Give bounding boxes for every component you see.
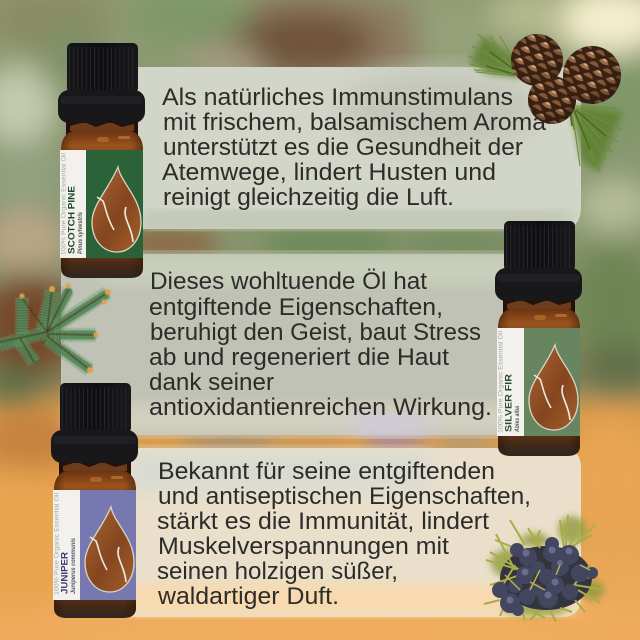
bottle: juniper xyxy=(51,383,138,618)
text block: juniper xyxy=(157,458,531,610)
text block: juniper: waldartiger Duft. xyxy=(157,583,339,610)
panel: scotch pine xyxy=(120,67,581,229)
text block: juniper: seinen holzigen süßer, xyxy=(157,558,398,585)
icon: juniper berries with needles xyxy=(484,515,605,622)
text block: scotch pine: reinigt gleichzeitig die Luft. xyxy=(163,184,454,211)
label text: juniper: 100% Pure Organic Essential Oil xyxy=(54,493,60,595)
label text: silver fir: 100% Pure Organic Essential Oil xyxy=(498,331,504,433)
text block: silver fir xyxy=(149,268,492,421)
text block: silver fir: dank seiner xyxy=(149,369,274,396)
icon: spruce sprig xyxy=(0,284,111,373)
label text: scotch pine: SCOTCH PINE xyxy=(66,186,78,254)
text block: silver fir: antioxidantienreichen Wirkung. xyxy=(149,394,492,421)
text block: silver fir: beruhigt den Geist, baut Stress xyxy=(150,319,481,346)
text block: juniper: Muskelverspannungen mit xyxy=(158,533,449,560)
label text: scotch pine: 100% Pure Organic Essential Oil xyxy=(62,153,68,255)
text block: silver fir: ab und regeneriert die Haut xyxy=(149,344,449,371)
label text: scotch pine: Pinus sylvestris xyxy=(78,211,84,254)
text block: silver fir: entgiftende Eigenschaften, xyxy=(149,294,443,321)
text block: scotch pine: Als natürliches Immunstimulans xyxy=(162,84,513,111)
label text: juniper xyxy=(54,493,77,595)
label text: scotch pine xyxy=(62,153,84,255)
text block: juniper: Bekannt für seine entgiftenden xyxy=(158,458,495,485)
label text: silver fir xyxy=(498,331,521,433)
label text: juniper: Juniperus communis xyxy=(71,537,77,594)
text block: juniper: stärkt es die Immunität, lindert xyxy=(157,508,489,535)
text block: scotch pine: unterstützt es die Gesundheit der xyxy=(163,134,523,161)
text block: scotch pine: mit frischem, balsamischem Aroma xyxy=(163,109,546,136)
panel: silver fir xyxy=(61,254,530,435)
text block: silver fir: Dieses wohltuende Öl hat xyxy=(150,268,427,295)
label text: juniper: JUNIPER xyxy=(60,552,70,594)
bottle: scotch pine xyxy=(58,43,145,278)
panel: juniper xyxy=(120,448,581,617)
icon: pine cones with needles xyxy=(468,34,624,172)
text block: scotch pine: Atemwege, lindert Husten und xyxy=(162,159,496,186)
text block: juniper: und antiseptischen Eigenschaften, xyxy=(158,483,531,510)
label text: silver fir: SILVER FIR xyxy=(504,374,514,432)
label text: silver fir: Abies alba xyxy=(515,405,521,433)
bottle: silver fir xyxy=(495,221,582,456)
text block: scotch pine xyxy=(162,84,546,211)
